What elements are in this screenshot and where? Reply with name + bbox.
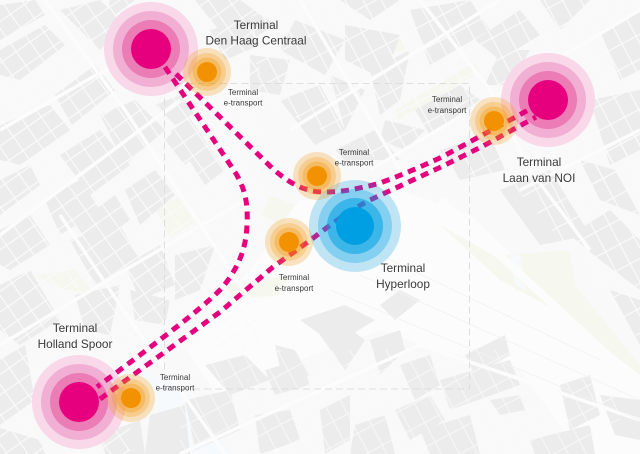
- e-transport terminal centre: [293, 152, 341, 200]
- label: e-transport near Laan van NOI: e-transport: [428, 106, 467, 115]
- route: Den Haag to Holland Spoor: [97, 67, 247, 387]
- e-transport terminal near Den Haag: [183, 48, 231, 96]
- terminal: Den Haag Centraal core: [131, 29, 171, 69]
- e-transport terminal near Laan van NOI: [470, 97, 518, 145]
- dashed transport routes: [97, 67, 536, 399]
- label: Terminal Laan van NOI: Terminal: [517, 155, 561, 169]
- e-transport terminal below centre: [265, 218, 313, 266]
- terminal: Hyperloop: [309, 180, 401, 272]
- label: e-transport centre: Terminal: [339, 148, 369, 157]
- dashed study area rectangle: [164, 84, 470, 389]
- label: Terminal Hyperloop: Terminal: [381, 261, 425, 275]
- label: e-transport near Den Haag: e-transport: [224, 98, 263, 108]
- label: Terminal Hyperloop: Hyperloop: [376, 277, 430, 291]
- terminal: Holland Spoor core: [59, 382, 99, 422]
- label: e-transport near Holland Spoor: Terminal: [160, 373, 190, 382]
- label: Terminal Den Haag Centraal: Den Haag Centraal: [206, 34, 306, 48]
- terminal: Laan van NOI outer rings: [501, 53, 595, 147]
- terminal: Laan van NOI core: [528, 80, 568, 120]
- terminal: Holland Spoor outer rings: [32, 355, 126, 449]
- park areas: [35, 35, 640, 375]
- label: e-transport below centre: e-transport: [275, 284, 314, 293]
- label: e-transport near Holland Spoor: e-transport: [156, 384, 195, 392]
- label: Terminal Holland Spoor: Holland Spoor: [38, 337, 112, 351]
- label: Terminal Holland Spoor: Terminal: [53, 321, 97, 335]
- label: e-transport centre: e-transport: [335, 158, 374, 168]
- block subdivisions: [0, 0, 260, 350]
- route: Den Haag to Laan van NOI: [176, 74, 532, 192]
- label: e-transport below centre: Terminal: [279, 273, 309, 282]
- label: e-transport near Laan van NOI: Terminal: [432, 95, 462, 104]
- e-transport terminal near Holland Spoor: [107, 374, 155, 422]
- route: Holland Spoor to Laan van NOI via Hyperloop: [100, 117, 536, 399]
- rail yard light area: [180, 190, 640, 454]
- label: Terminal Den Haag Centraal: Terminal: [234, 18, 278, 32]
- label: e-transport near Den Haag: Terminal: [228, 88, 258, 97]
- label: Terminal Laan van NOI: Laan van NOI: [503, 171, 575, 185]
- terminal: Den Haag Centraal outer rings: [104, 2, 198, 96]
